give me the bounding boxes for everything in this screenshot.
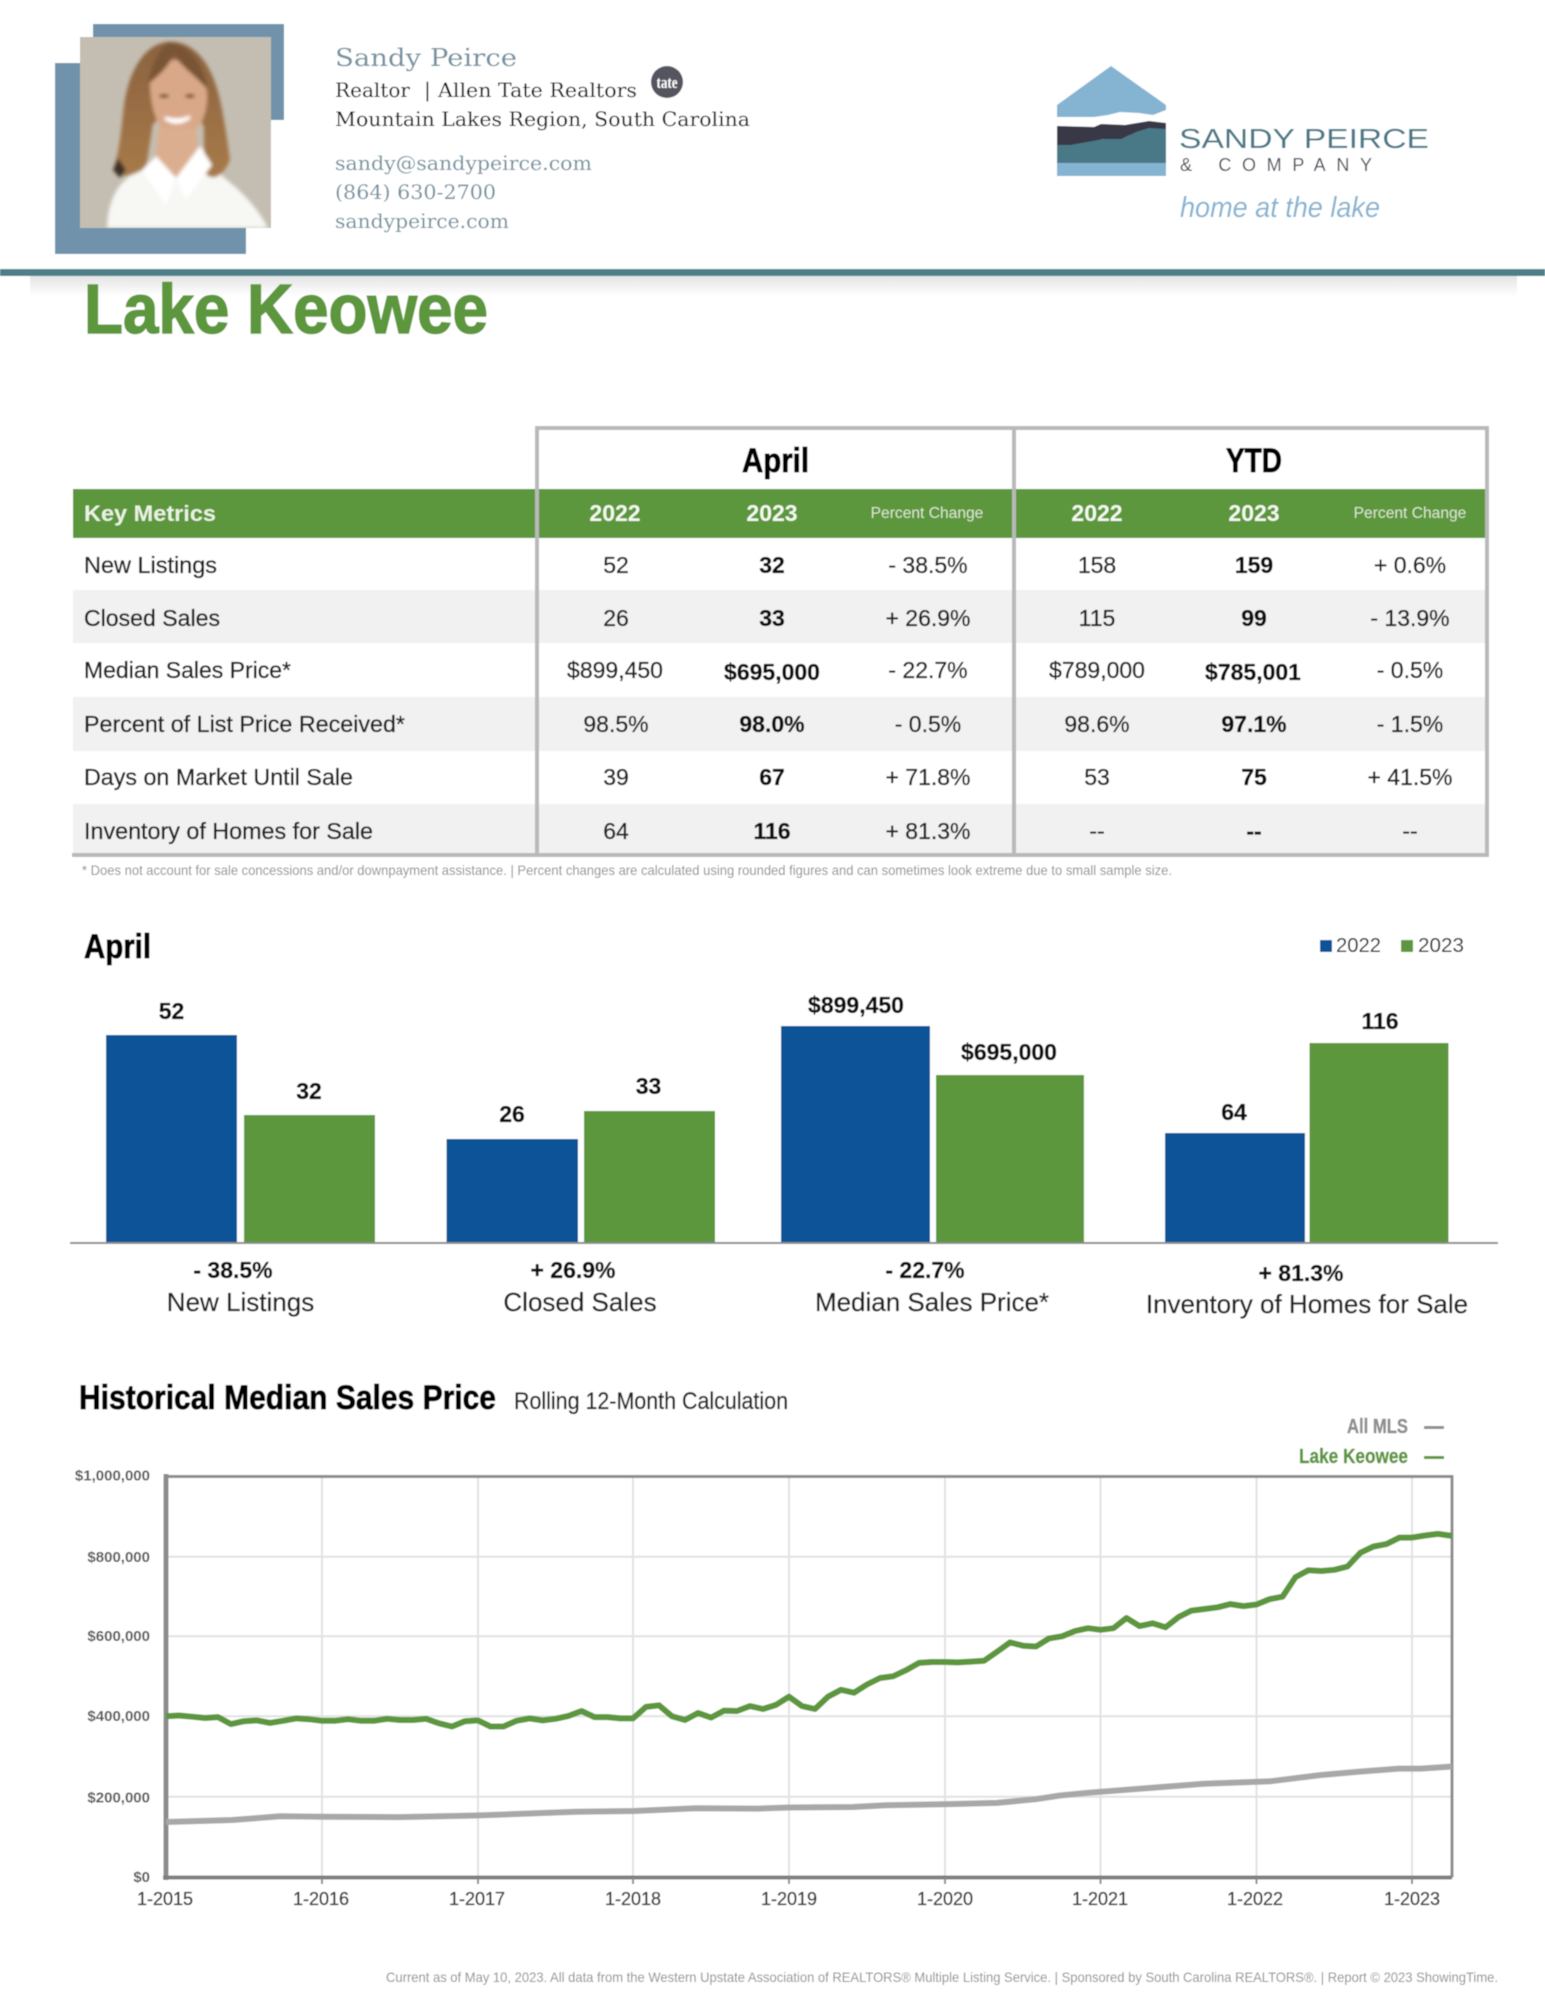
row: Inventory of Homes for Sale: -- (1402, 818, 1418, 844)
row: Inventory of Homes for Sale: 116 (753, 818, 791, 844)
group: Median Sales Price bars (781, 992, 1084, 1317)
row: New Listings (84, 552, 1446, 578)
bar chart: April metrics (70, 992, 1498, 1319)
row: New Listings: - 38.5% (888, 552, 968, 578)
row: Median Sales Price: $785,001 (1205, 659, 1301, 685)
row: New Listings: 32 (759, 552, 785, 578)
table column headers: 2022 (1071, 500, 1123, 526)
group: New Listings bars: - 38.5% (193, 1257, 273, 1283)
agent contact details: | (424, 78, 431, 103)
group: Inventory of Homes bars: + 81.3% (1258, 1260, 1344, 1286)
row: Days on Market Until Sale: + 71.8% (885, 764, 971, 790)
legend: line chart series: Lake Keowee (1299, 1446, 1408, 1468)
x axis labels: 1-2017 (449, 1889, 505, 1909)
row: Days on Market Until Sale: 53 (1084, 764, 1110, 790)
table period headings: YTD (1226, 442, 1282, 480)
row: Percent of List Price Received (84, 711, 1443, 737)
agent contact details: Sandy Peirce (335, 44, 517, 72)
row: Median Sales Price (84, 657, 1443, 685)
group: New Listings bars: 32 (296, 1078, 322, 1104)
row: New Listings: 158 (1078, 552, 1116, 578)
header divider bar with shadow (0, 269, 1545, 296)
table column headers: 2022 (589, 500, 641, 526)
row: Median Sales Price: $899,450 (567, 657, 663, 683)
legend: bar chart years: 2023 (1418, 935, 1464, 957)
row: Days on Market Until Sale: 67 (759, 764, 785, 790)
icon: Allen Tate round badge (651, 66, 683, 98)
y axis labels: $200,000 (87, 1790, 150, 1806)
icon: Allen Tate round badge: tate (656, 73, 678, 92)
row: Median Sales Price: Median Sales Price* (84, 657, 291, 683)
group: Closed Sales bars: Closed Sales (503, 1287, 657, 1317)
row: Inventory of Homes for Sale: + 81.3% (885, 818, 971, 844)
table period headings (742, 442, 1282, 480)
group: New Listings bars: New Listings (167, 1287, 314, 1317)
row: Days on Market Until Sale: Days on Market Until Sale (84, 764, 353, 790)
line chart: historical median sales price (75, 1468, 1452, 1909)
table column headers: Percent Change (1354, 505, 1466, 522)
group: New Listings bars: 52 (159, 998, 184, 1024)
logo: Sandy Peirce and Company: home at the lake (1180, 192, 1380, 224)
group: Inventory of Homes bars: Inventory of Homes for Sale (1146, 1289, 1468, 1319)
group: Inventory of Homes bars (1146, 1008, 1468, 1319)
group: Median Sales Price bars: $899,450 (808, 992, 904, 1018)
agent contact details: Realtor (335, 78, 410, 102)
row: Closed Sales: 33 (759, 605, 785, 631)
row: Median Sales Price: $695,000 (724, 659, 820, 685)
agent contact details: Allen Tate Realtors (437, 78, 637, 102)
row: Inventory of Homes for Sale (84, 818, 1418, 844)
row: Closed Sales: + 26.9% (885, 605, 971, 631)
x axis labels: 1-2020 (917, 1889, 973, 1909)
row: Percent of List Price Received: 97.1% (1221, 711, 1287, 737)
row: Median Sales Price: - 22.7% (888, 657, 968, 683)
group: Inventory of Homes bars: 116 (1361, 1008, 1399, 1034)
table column headers: 2023 (746, 500, 798, 526)
heading: Historical Median Sales Price: Historical Median Sales Price (79, 1379, 496, 1417)
row: Closed Sales: 115 (1079, 605, 1115, 631)
y axis labels: $400,000 (87, 1708, 150, 1725)
series: Lake Keowee line (166, 1534, 1452, 1726)
row: Inventory of Homes for Sale: 64 (603, 818, 629, 844)
table column headers: 2023 (1228, 500, 1280, 526)
row: Days on Market Until Sale: 39 (603, 764, 629, 790)
agent contact details (335, 44, 750, 233)
group: Median Sales Price bars: - 22.7% (885, 1257, 965, 1283)
x axis labels (137, 1889, 1440, 1909)
legend: line chart series: All MLS (1347, 1416, 1408, 1438)
portrait frame: blue offset squares (55, 24, 284, 254)
x axis labels: 1-2023 (1384, 1889, 1440, 1909)
table period headings: April (742, 442, 809, 480)
row: Percent of List Price Received: 98.6% (1064, 711, 1130, 737)
bar chart baseline (70, 1242, 1498, 1244)
row: Days on Market Until Sale (84, 764, 1453, 790)
table green header row (73, 489, 1486, 538)
x axis labels: 1-2018 (605, 1889, 661, 1909)
logo: Sandy Peirce and Company (1057, 66, 1429, 224)
table frame lines (72, 428, 1489, 856)
y axis labels (75, 1468, 150, 1886)
chart axes and frame (163, 1474, 1452, 1884)
agent contact details: (864) 630-2700 (335, 180, 496, 204)
agent portrait photo (80, 37, 271, 228)
row: Closed Sales: 26 (603, 605, 629, 631)
table column headers: Key Metrics (84, 501, 216, 526)
panel: key metrics table (72, 428, 1489, 856)
group: Inventory of Homes bars: 64 (1221, 1099, 1247, 1125)
table column headers: Percent Change (871, 505, 983, 522)
row: Closed Sales: 99 (1241, 605, 1267, 631)
group: Closed Sales bars (446, 1073, 715, 1317)
logo: Sandy Peirce and Company: & COMPANY (1180, 155, 1372, 175)
row: New Listings: 52 (603, 552, 629, 578)
y axis labels: $0 (133, 1869, 150, 1886)
row: Inventory of Homes for Sale: Inventory of Homes for Sale (84, 818, 373, 844)
row: Days on Market Until Sale: + 41.5% (1367, 764, 1453, 790)
row: New Listings: + 0.6% (1374, 552, 1446, 578)
row: New Listings: 159 (1235, 552, 1273, 578)
header band: agent contact and logo (55, 24, 1429, 254)
row: Percent of List Price Received: Percent of List Price Received* (84, 711, 405, 737)
row: Median Sales Price: $789,000 (1049, 657, 1145, 683)
group: Median Sales Price bars: Median Sales Price* (815, 1287, 1049, 1317)
row: Closed Sales: Closed Sales (84, 605, 220, 631)
agent contact details: sandypeirce.com (335, 209, 509, 233)
row: New Listings: New Listings (84, 552, 217, 578)
group: Closed Sales bars: + 26.9% (530, 1257, 616, 1283)
group: Closed Sales bars: 33 (636, 1073, 661, 1099)
x axis labels: 1-2019 (761, 1889, 817, 1909)
row: Days on Market Until Sale: 75 (1241, 764, 1267, 790)
row: Percent of List Price Received: 98.5% (583, 711, 649, 737)
agent contact details: Mountain Lakes Region, South Carolina (335, 107, 750, 131)
row: Percent of List Price Received: - 1.5% (1377, 711, 1443, 737)
table footnote: * Does not account for sale concessions and/or downpayment assistance. | Percent changes are calculated using rounded figures and can sometimes look extreme due to small sample size. (82, 862, 1172, 878)
row: Inventory of Homes for Sale: -- (1089, 818, 1105, 844)
heading: April bar chart: April (84, 928, 151, 966)
title: Lake Keowee: Lake Keowee (84, 270, 488, 348)
legend: bar chart years: 2022 (1336, 935, 1381, 957)
row: Percent of List Price Received: - 0.5% (895, 711, 961, 737)
group: New Listings bars (106, 998, 375, 1317)
group: Closed Sales bars: 26 (499, 1101, 525, 1127)
group: Median Sales Price bars: $695,000 (961, 1039, 1057, 1065)
row: Closed Sales (84, 605, 1450, 631)
heading: Historical Median Sales Price (79, 1379, 788, 1417)
y axis labels: $1,000,000 (75, 1468, 150, 1484)
heading: Historical Median Sales Price: Rolling 12-Month Calculation (514, 1388, 788, 1415)
x axis labels: 1-2021 (1072, 1889, 1128, 1909)
legend: bar chart years (1320, 935, 1464, 957)
x axis labels: 1-2016 (293, 1889, 349, 1909)
logo: Sandy Peirce and Company: SANDY PEIRCE (1179, 123, 1429, 154)
row: Closed Sales: - 13.9% (1370, 605, 1450, 631)
x axis labels: 1-2022 (1227, 1889, 1283, 1909)
table column headers (84, 500, 1466, 526)
y axis labels: $800,000 (87, 1549, 150, 1566)
table row shading (73, 590, 1485, 854)
row: Inventory of Homes for Sale: -- (1246, 818, 1262, 844)
series: All MLS line (166, 1766, 1452, 1822)
y axis labels: $600,000 (87, 1628, 150, 1645)
legend: line chart series (1299, 1416, 1444, 1468)
x axis labels: 1-2015 (137, 1889, 193, 1909)
agent contact details: sandy@sandypeirce.com (335, 151, 592, 175)
row: Median Sales Price: - 0.5% (1377, 657, 1443, 683)
row: Percent of List Price Received: 98.0% (739, 711, 805, 737)
